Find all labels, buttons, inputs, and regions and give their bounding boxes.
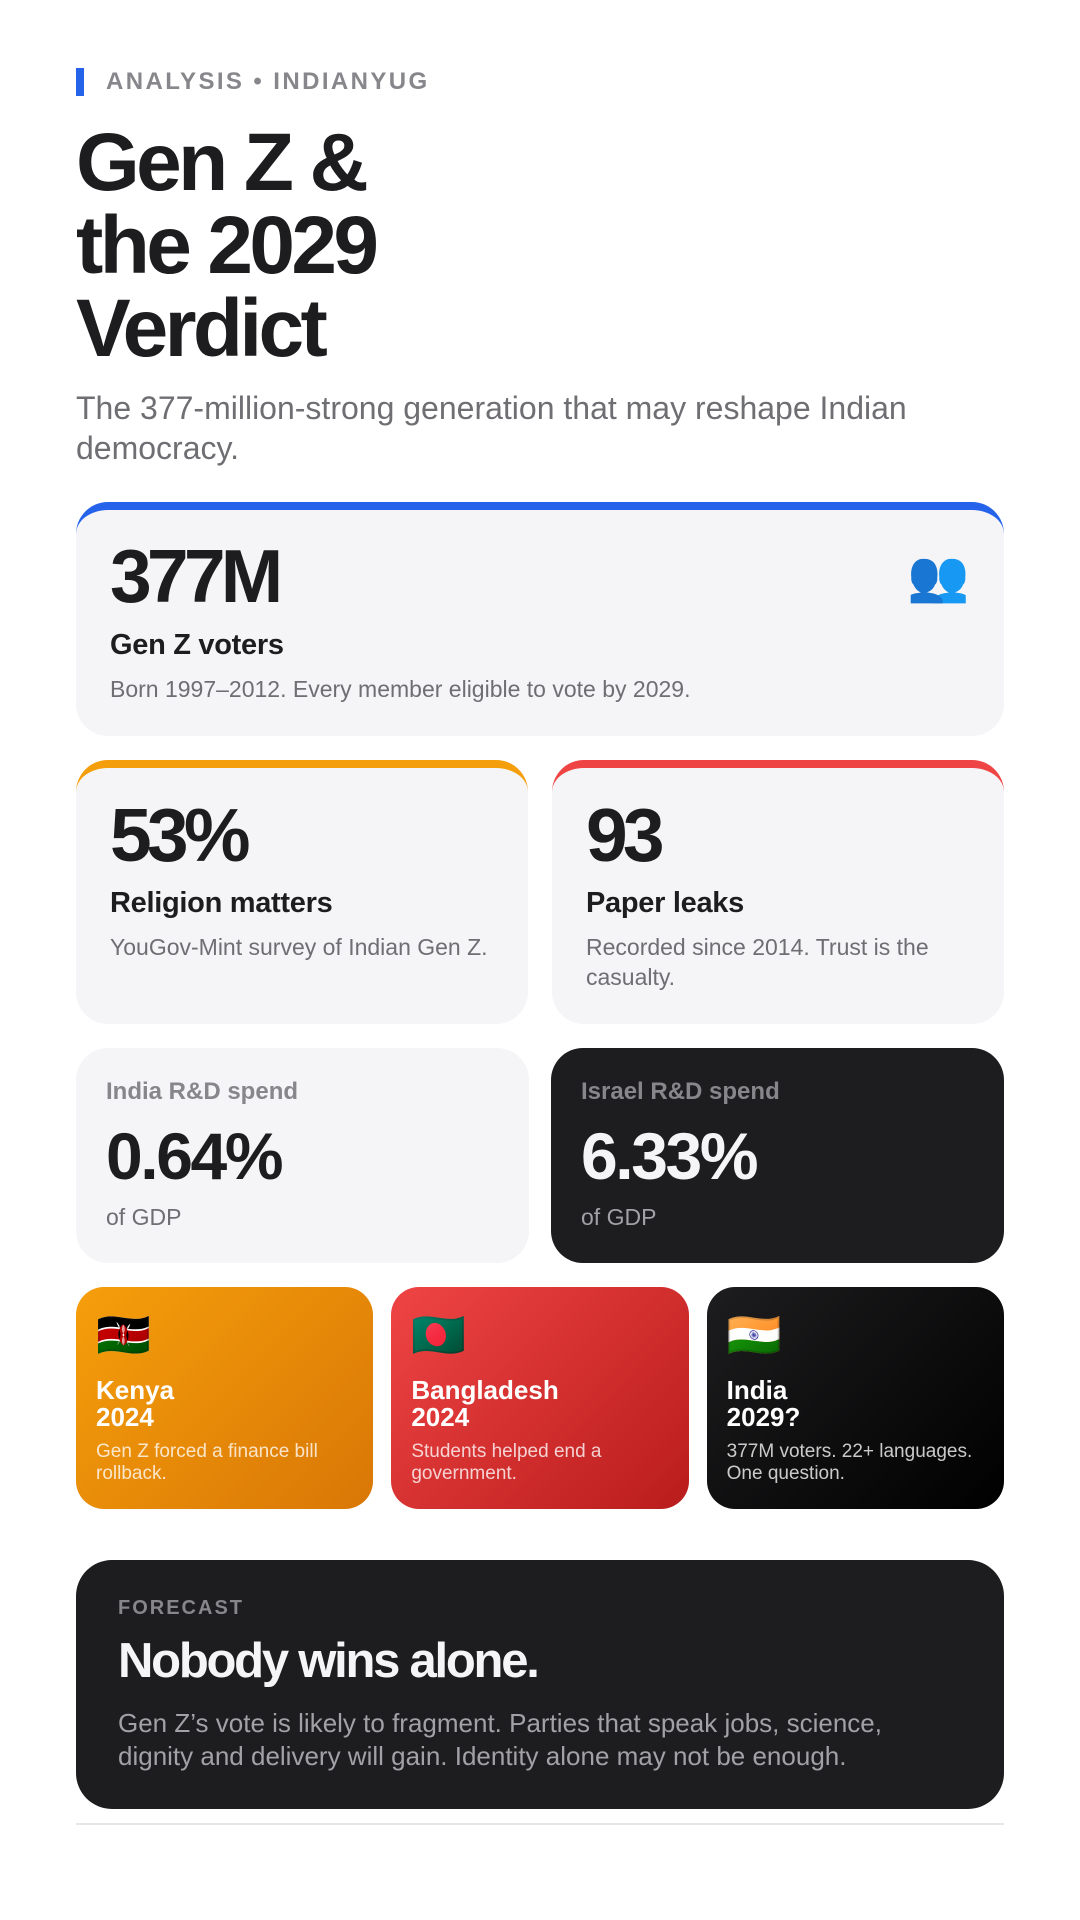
stat: 53%: 53%: [110, 793, 246, 877]
title: Gen Z &: [76, 117, 365, 208]
description: government.: [411, 1462, 517, 1484]
title: [76, 117, 376, 374]
icon: India flag: 🇮🇳: [727, 1311, 781, 1360]
description: Gen Z forced a finance bill: [96, 1440, 318, 1462]
unit: of GDP: [106, 1204, 181, 1230]
heading: [727, 1375, 800, 1432]
description: YouGov-Mint survey of Indian Gen Z.: [110, 934, 488, 960]
description: Born 1997–2012. Every member eligible to vote by 2029.: [110, 676, 690, 702]
subtitle: The 377-million-strong generation that may reshape Indian democracy.: [76, 390, 907, 466]
heading: India: [727, 1375, 787, 1405]
eyebrow accent bar: [76, 68, 84, 96]
unit: of GDP: [581, 1204, 656, 1230]
stat: 6.33%: 6.33%: [581, 1119, 756, 1193]
panel: Israel R&D: [551, 1048, 1004, 1263]
description: rollback.: [96, 1462, 167, 1484]
forecast body: Gen Z’s vote is likely to fragment. Parties that speak jobs, science, dignity and delivery will gain. Identity alone may not be enough.: [118, 1708, 882, 1770]
heading: 2024: [411, 1402, 469, 1432]
icon: Kenya flag: 🇰🇪: [96, 1311, 151, 1360]
eyebrow: ANALYSIS • INDIANYUG: [106, 68, 430, 95]
description: 377M voters. 22+ languages.: [727, 1440, 972, 1462]
description: Recorded since 2014. Trust is the casualty.: [586, 934, 929, 990]
panel: Kenya: [76, 1287, 373, 1509]
description: [727, 1440, 972, 1484]
description: Students helped end a: [411, 1440, 602, 1462]
panel: Bangladesh: [391, 1287, 689, 1509]
heading: [411, 1375, 559, 1432]
icon: Bangladesh flag: 🇧🇩: [411, 1311, 466, 1360]
icon: people: 👥: [907, 548, 970, 604]
panel: forecast: [76, 1560, 1004, 1809]
heading: 2024: [96, 1402, 154, 1432]
heading: 2029?: [727, 1402, 800, 1432]
title: the 2029: [76, 200, 375, 291]
panel: paper leaks: [552, 760, 1004, 1024]
panel: Gen Z voters: [76, 502, 1004, 736]
heading: [96, 1375, 174, 1432]
panel: India: [707, 1287, 1004, 1509]
forecast heading: Nobody wins alone.: [118, 1634, 538, 1688]
stat: 377M: 377M: [110, 534, 278, 618]
description: [96, 1440, 318, 1484]
stat: 0.64%: 0.64%: [106, 1119, 281, 1193]
label: Israel R&D spend: [581, 1078, 780, 1105]
forecast label: FORECAST: [118, 1597, 244, 1619]
panel: India R&D: [76, 1048, 529, 1263]
label: Religion matters: Religion matters: [110, 887, 332, 919]
description: [411, 1440, 602, 1484]
description: One question.: [727, 1462, 845, 1484]
label: Paper leaks: Paper leaks: [586, 887, 744, 919]
panel: religion: [76, 760, 528, 1024]
label: India R&D spend: [106, 1078, 298, 1105]
heading: Bangladesh: [411, 1375, 559, 1405]
stat: 93: 93: [586, 793, 660, 877]
heading: Kenya: [96, 1375, 174, 1405]
label: Gen Z voters: Gen Z voters: [110, 629, 284, 661]
title: Verdict: [76, 283, 324, 374]
